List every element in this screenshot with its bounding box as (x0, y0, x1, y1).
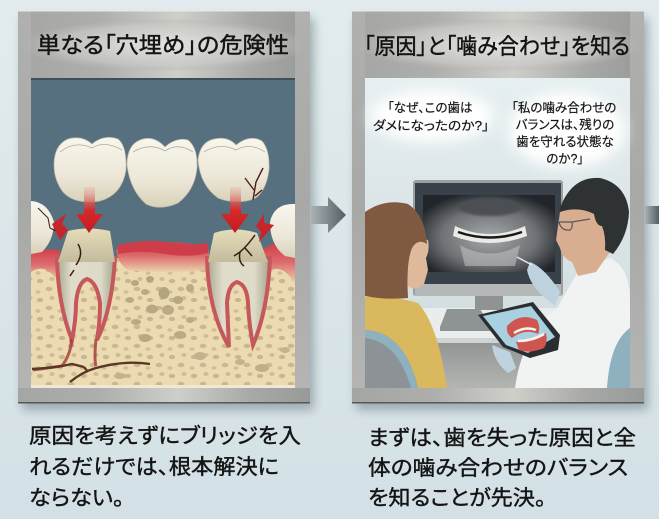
illustration: dentist consultation (365, 78, 630, 388)
arrow: left crown down (76, 187, 103, 233)
text: panel 2 caption: 体の噛み合わせのバランス (368, 457, 628, 480)
text: panel 1 caption: 原因を考えずにブリッジを入 (29, 425, 301, 448)
panel: know cause and bite (352, 10, 648, 410)
gum line (31, 241, 295, 284)
heading: panel 1: 単なる「穴埋め」の危険性 (37, 33, 289, 58)
panel frame (352, 10, 644, 404)
three-unit bridge crown (54, 137, 269, 207)
text: panel 2 caption: を知ることが先決。 (368, 487, 546, 510)
fracture lines in bone (32, 363, 150, 382)
patient (365, 202, 447, 388)
tablet with dental arch (478, 302, 560, 358)
arrow: right crown down (221, 187, 249, 233)
right tooth with cracked stump (207, 230, 270, 347)
keyboard (440, 309, 492, 331)
text: panel 1 caption: ならない。 (29, 487, 124, 510)
desk (365, 308, 630, 388)
heading: panel 2: 「原因」と「噛み合わせ」を知る (364, 34, 630, 59)
quote: dentist: のか?」 (546, 152, 584, 166)
left tooth with cracked root (33, 228, 115, 370)
quote: patient (373, 101, 489, 133)
quote: patient: ダメになったのか?」 (373, 118, 489, 133)
text: panel 2 caption: まずは、歯を失った原因と全 (368, 427, 636, 450)
dentist (492, 178, 630, 388)
neighbouring right tooth (270, 204, 295, 258)
quote: dentist: バランスは、残りの (515, 118, 614, 132)
red impact marks (52, 214, 274, 242)
thought clouds (370, 90, 625, 168)
arrow: panel 2 onward (645, 206, 659, 224)
jaw bone (31, 258, 295, 388)
quote: dentist: 歯を守れる状態な (516, 135, 614, 149)
panel: risk of simply filling the gap (18, 10, 314, 410)
arrow: panel 1 to panel 2 (311, 197, 346, 233)
monitor with panoramic x-ray (413, 180, 563, 310)
text: panel 2 caption (368, 427, 636, 510)
neighbouring left tooth (31, 201, 58, 254)
panel frame (18, 10, 310, 404)
text: panel 1 caption (29, 425, 301, 510)
quote: patient: 「なぜ、この歯は (387, 101, 473, 115)
text: panel 1 caption: れるだけでは、根本解決に (29, 456, 279, 479)
quote: dentist: 「私の噛み合わせの (512, 101, 616, 115)
illustration: dental bridge over damaged teeth (31, 78, 295, 388)
quote: dentist (512, 101, 616, 166)
